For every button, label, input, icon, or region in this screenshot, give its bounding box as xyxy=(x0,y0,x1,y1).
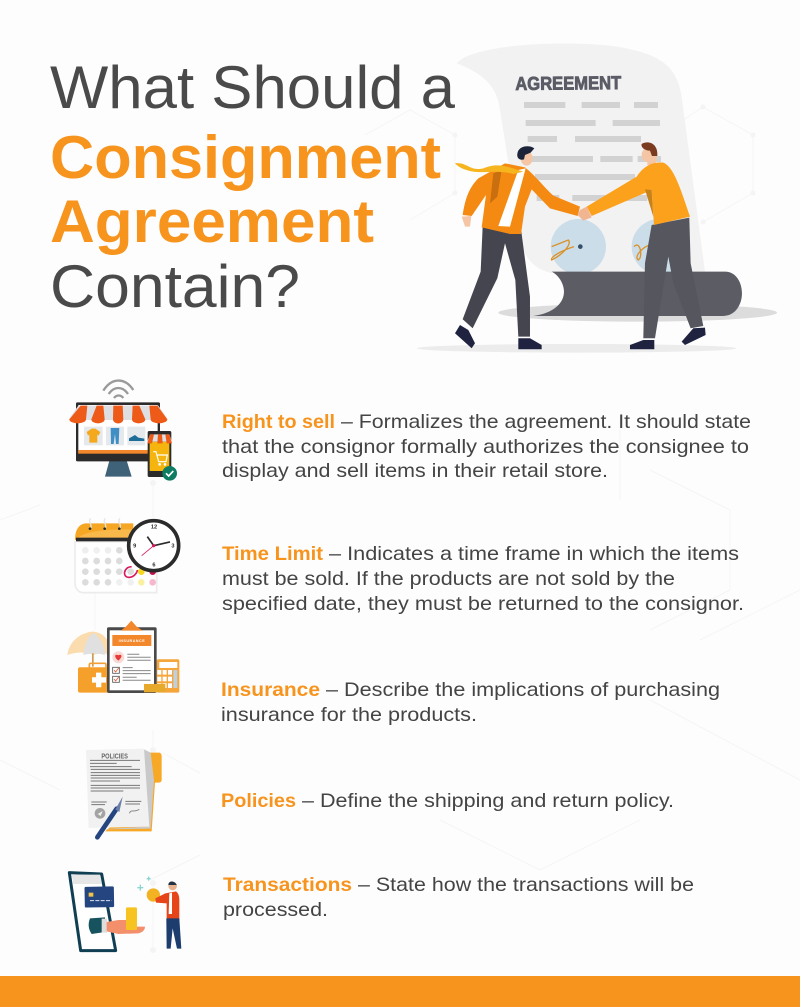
icon: calendar and clock xyxy=(75,518,179,593)
icon: calendar and clock: 9 xyxy=(133,544,136,550)
text: time limit: specified date, they must be returned to the consignor. xyxy=(222,593,744,615)
text: time limit: – Indicates a time frame in which the items xyxy=(329,543,739,565)
footer bar xyxy=(0,976,800,1007)
icon: calendar and clock: 12 xyxy=(151,524,157,530)
text: transactions xyxy=(223,874,694,921)
man left xyxy=(455,146,580,349)
icon: policies document xyxy=(86,749,162,837)
text: right to sell: that the consignor formally authorizes the consignee to xyxy=(222,436,749,458)
title: Agreement xyxy=(50,188,374,255)
text: right to sell: – Formalizes the agreement. It should state xyxy=(341,411,751,433)
text: right to sell xyxy=(222,411,751,482)
text: time limit: must be sold. If the products are not sold by the xyxy=(222,568,675,590)
text: insurance: – Describe the implications of purchasing xyxy=(326,679,720,701)
text: time limit xyxy=(222,543,744,615)
agreement paper xyxy=(457,44,705,274)
icon: online store xyxy=(69,381,177,481)
icon: mobile transaction xyxy=(69,873,181,951)
agreement paper: AGREEMENT xyxy=(515,72,622,94)
paper roll xyxy=(533,272,742,316)
title: What Should a xyxy=(50,54,456,121)
title: Consignment xyxy=(50,124,441,191)
text: insurance: Insurance xyxy=(221,679,320,701)
text: insurance: insurance for the products. xyxy=(221,704,477,726)
man right xyxy=(578,142,706,349)
text: right to sell: Right to sell xyxy=(222,411,335,433)
title: Contain? xyxy=(50,253,300,320)
text: right to sell: display and sell items in their retail store. xyxy=(222,460,608,482)
title xyxy=(50,54,456,320)
icon: insurance clipboard xyxy=(67,621,179,693)
icon: calendar and clock: 3 xyxy=(171,544,175,550)
text: insurance xyxy=(221,679,720,726)
text: transactions: – State how the transactions will be xyxy=(358,874,694,896)
icon: policies document: POLICIES xyxy=(101,751,128,760)
illustration: handshake over agreement xyxy=(417,44,777,353)
text: time limit: Time Limit xyxy=(222,543,324,565)
text: policies: – Define the shipping and return policy. xyxy=(302,790,674,812)
ground shadow xyxy=(417,344,737,353)
text: policies: Policies xyxy=(221,790,296,812)
text: transactions: Transactions xyxy=(223,874,352,896)
icon: insurance clipboard: INSURANCE xyxy=(119,639,145,643)
icon: calendar and clock: 6 xyxy=(152,563,156,569)
text: transactions: processed. xyxy=(223,899,328,921)
